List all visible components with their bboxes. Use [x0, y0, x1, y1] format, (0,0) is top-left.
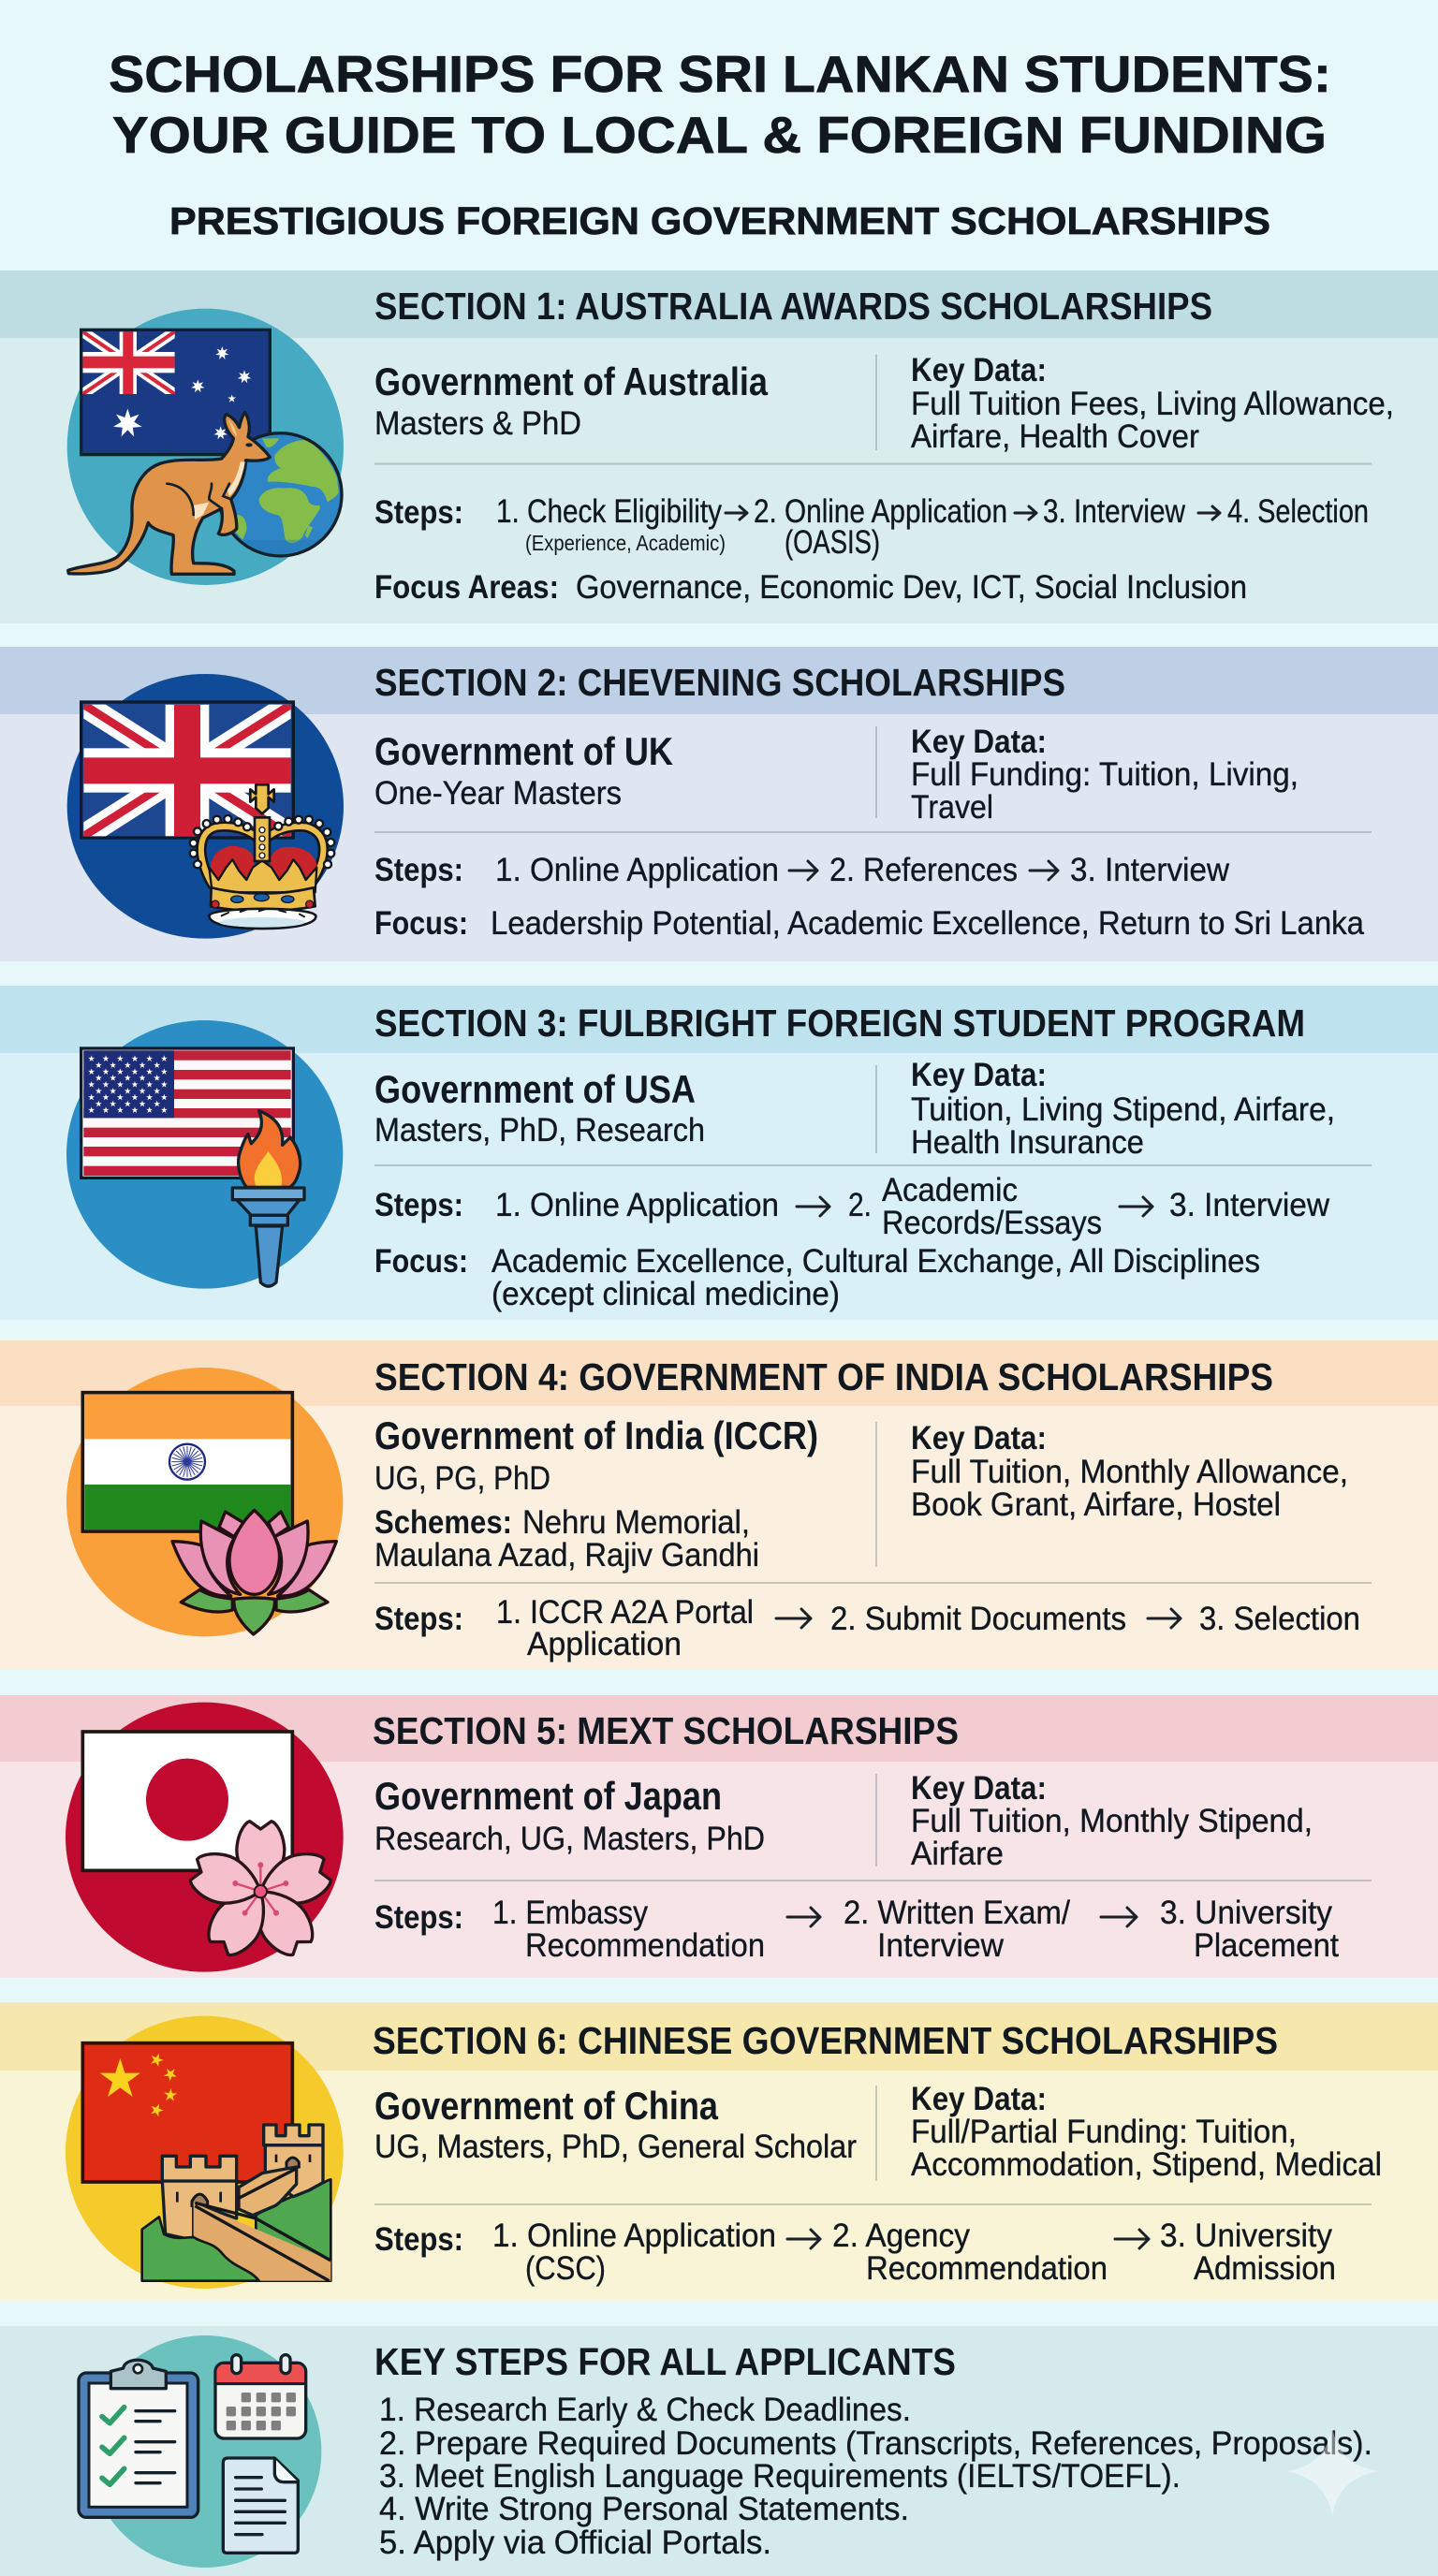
provider and level: Research, UG, Masters, PhD: [374, 1821, 765, 1857]
key data: Key Data:: [911, 724, 1047, 760]
key data: Full Funding: Tuition, Living,: [911, 756, 1299, 793]
key data: [911, 724, 1299, 826]
panel: section 3 Fulbright: [0, 986, 1438, 1320]
steps: 2.: [848, 1187, 872, 1223]
focus: [374, 1243, 1260, 1312]
focus: (except clinical medicine): [492, 1276, 840, 1312]
focus: Leadership Potential, Academic Excellence, Return to Sri Lanka: [491, 905, 1364, 942]
focus areas: Focus Areas:: [374, 569, 559, 606]
panel: key steps for all applicants: [0, 2326, 1438, 2576]
focus: Academic Excellence, Cultural Exchange, All Disciplines: [492, 1243, 1260, 1280]
provider and level: One-Year Masters: [374, 775, 622, 812]
panel: section 2 Chevening: [0, 647, 1438, 961]
provider and level: [374, 2084, 857, 2165]
steps: [374, 1594, 1360, 1662]
provider and level: Government of Australia: [374, 359, 769, 403]
section heading: SECTION 4: GOVERNMENT OF INDIA SCHOLARSHIPS: [374, 1355, 1273, 1398]
key data: [911, 352, 1394, 455]
provider and level: Masters & PhD: [374, 405, 581, 442]
subtitle: PRESTIGIOUS FOREIGN GOVERNMENT SCHOLARSHIPS: [169, 199, 1270, 242]
provider, level and schemes: UG, PG, PhD: [374, 1460, 550, 1497]
provider and level: Masters, PhD, Research: [374, 1112, 705, 1149]
steps: 2. Agency: [832, 2217, 970, 2254]
provider, level and schemes: Schemes:: [374, 1504, 512, 1541]
panel: section 5 MEXT: [0, 1695, 1438, 1978]
numbered list: 5. Apply via Official Portals.: [379, 2525, 771, 2561]
steps: 3. Interview: [1043, 493, 1186, 530]
steps: Steps:: [374, 1899, 463, 1936]
steps: 4. Selection: [1227, 493, 1369, 530]
steps: Steps:: [374, 494, 463, 531]
key data: Accommodation, Stipend, Medical: [911, 2146, 1382, 2183]
key data: Airfare: [911, 1836, 1004, 1872]
key data: Key Data:: [911, 1057, 1047, 1093]
steps: (OASIS): [785, 524, 880, 561]
steps: Steps:: [374, 2221, 463, 2258]
section heading: SECTION 6: CHINESE GOVERNMENT SCHOLARSHIPS: [373, 2019, 1278, 2062]
steps: [374, 1172, 1330, 1241]
key data: Full Tuition, Monthly Stipend,: [911, 1803, 1313, 1839]
focus: Focus:: [374, 905, 468, 942]
steps: Steps:: [374, 852, 463, 888]
focus: Focus:: [374, 1243, 468, 1280]
key data: Airfare, Health Cover: [911, 418, 1199, 455]
provider and level: [374, 1067, 705, 1149]
steps: 3. Interview: [1169, 1187, 1330, 1223]
steps: Records/Essays: [882, 1205, 1102, 1241]
provider and level: [374, 729, 673, 812]
numbered list: 3. Meet English Language Requirements (IELTS/TOEFL).: [379, 2458, 1181, 2495]
key data: Book Grant, Airfare, Hostel: [911, 1486, 1281, 1523]
steps: 3. University: [1160, 2217, 1332, 2254]
icon: Indian flag and lotus: [66, 1368, 343, 1636]
provider, level and schemes: [374, 1413, 818, 1573]
key data: Key Data:: [911, 2081, 1047, 2117]
steps: 1. Embassy: [492, 1895, 648, 1931]
numbered list: [379, 2392, 1372, 2561]
key data: Key Data:: [911, 1770, 1047, 1807]
provider, level and schemes: Government of India (ICCR): [374, 1413, 818, 1457]
steps: [374, 1895, 1339, 1964]
steps: 3. Interview: [1070, 852, 1230, 888]
icon: watermark sparkle: [1285, 2426, 1380, 2516]
steps: Placement: [1194, 1927, 1339, 1964]
key data: Full/Partial Funding: Tuition,: [911, 2114, 1297, 2150]
focus areas: Governance, Economic Dev, ICT, Social Inclusion: [576, 569, 1247, 606]
key data: Health Insurance: [911, 1124, 1144, 1161]
icon: UK flag and crown: [67, 674, 344, 939]
key data: Full Tuition Fees, Living Allowance,: [911, 386, 1394, 422]
provider and level: [374, 359, 769, 442]
provider and level: Government of Japan: [374, 1774, 722, 1818]
steps: Admission: [1194, 2250, 1336, 2287]
steps: 2. References: [829, 852, 1018, 888]
steps: Recommendation: [866, 2250, 1108, 2287]
key data: Key Data:: [911, 352, 1047, 388]
steps: Steps:: [374, 1187, 463, 1223]
steps: Steps:: [374, 1601, 463, 1637]
steps: Academic: [882, 1172, 1018, 1208]
panel: section 1 Australia: [0, 271, 1438, 623]
title: SCHOLARSHIPS FOR SRI LANKAN STUDENTS:: [109, 45, 1331, 103]
provider, level and schemes: Nehru Memorial,: [522, 1504, 750, 1541]
numbered list: 4. Write Strong Personal Statements.: [379, 2491, 909, 2527]
steps: Application: [527, 1626, 682, 1662]
icon: Chinese flag and Great Wall: [66, 2016, 344, 2289]
key data: Full Tuition, Monthly Allowance,: [911, 1454, 1348, 1490]
section heading: SECTION 5: MEXT SCHOLARSHIPS: [373, 1709, 959, 1752]
steps: Recommendation: [525, 1927, 765, 1964]
icon: Japanese flag and cherry blossom: [66, 1703, 344, 1972]
steps: [374, 2217, 1336, 2287]
numbered list: 1. Research Early & Check Deadlines.: [379, 2392, 911, 2428]
steps: 2. Written Exam/: [844, 1895, 1070, 1931]
icon: Australian flag, kangaroo and globe: [67, 309, 349, 585]
steps: 1. Online Application: [495, 852, 779, 888]
key data: [911, 1420, 1348, 1523]
provider and level: Government of USA: [374, 1067, 696, 1111]
numbered list: 2. Prepare Required Documents (Transcripts, References, Proposals).: [379, 2425, 1372, 2462]
key data: Key Data:: [911, 1420, 1047, 1456]
key data: [911, 1057, 1335, 1161]
key data: Tuition, Living Stipend, Airfare,: [911, 1091, 1335, 1128]
key data: [911, 2081, 1382, 2183]
provider and level: Government of China: [374, 2084, 719, 2128]
provider and level: [374, 1774, 765, 1857]
steps: 1. Online Application: [492, 2217, 776, 2254]
panel: section 6 China: [0, 2002, 1438, 2301]
key data: [911, 1770, 1313, 1872]
steps: [374, 493, 1369, 561]
provider, level and schemes: Maulana Azad, Rajiv Gandhi: [374, 1537, 759, 1573]
key data: Travel: [911, 789, 993, 826]
icon: US flag and torch: [66, 1020, 343, 1289]
icon: clipboard, calendar and document: [79, 2335, 321, 2568]
steps: 2. Submit Documents: [830, 1601, 1126, 1637]
steps: 3. University: [1160, 1895, 1332, 1931]
steps: 2. Online Application: [754, 493, 1007, 530]
steps: (CSC): [525, 2250, 606, 2287]
provider and level: Government of UK: [374, 729, 673, 773]
steps: 1. ICCR A2A Portal: [496, 1594, 754, 1631]
section heading: SECTION 1: AUSTRALIA AWARDS SCHOLARSHIPS: [374, 285, 1212, 328]
section heading: SECTION 2: CHEVENING SCHOLARSHIPS: [374, 661, 1065, 704]
steps: 3. Selection: [1199, 1601, 1360, 1637]
title: [109, 45, 1331, 164]
steps: Interview: [877, 1927, 1005, 1964]
title: YOUR GUIDE TO LOCAL & FOREIGN FUNDING: [112, 106, 1327, 164]
steps: 1. Check Eligibility: [496, 493, 722, 530]
section heading: SECTION 3: FULBRIGHT FOREIGN STUDENT PROGRAM: [374, 1002, 1305, 1045]
panel: section 4 India: [0, 1340, 1438, 1669]
steps: 1. Online Application: [495, 1187, 779, 1223]
provider and level: UG, Masters, PhD, General Scholar: [374, 2129, 857, 2165]
steps: (Experience, Academic): [525, 531, 726, 555]
steps: [374, 852, 1230, 888]
heading: KEY STEPS FOR ALL APPLICANTS: [374, 2340, 956, 2383]
